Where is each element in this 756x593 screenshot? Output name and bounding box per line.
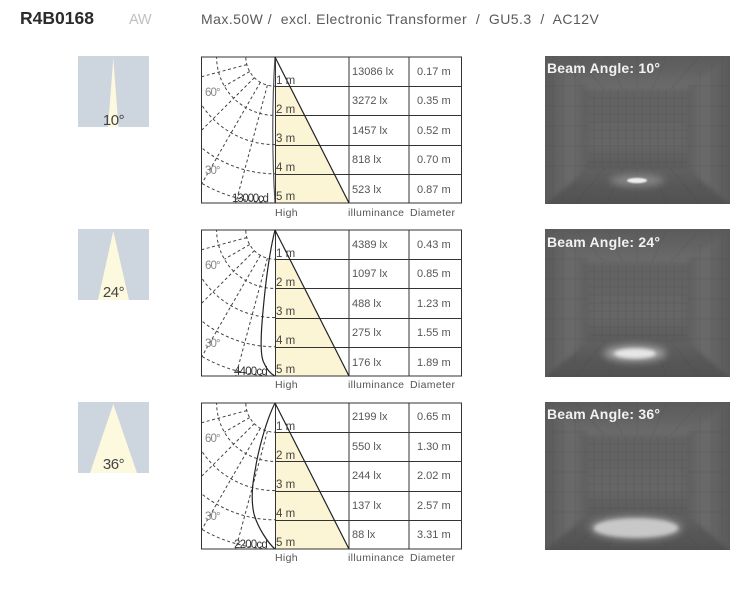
icon: 36 degree beam cone: [78, 402, 149, 473]
chart: polar distribution and illuminance table, 36 degrees: 244 lx: [352, 470, 382, 482]
chart: polar distribution and illuminance table, 24 degrees: 0.85 m: [417, 268, 451, 280]
chart: polar distribution and illuminance table, 36 degrees: 60°: [205, 433, 220, 445]
chart: polar distribution and illuminance table, 24 degrees: 60°: [205, 260, 220, 272]
panel: 24 degree beam row: [78, 229, 730, 390]
chart: polar distribution and illuminance table, 24 degrees: 2 m: [276, 277, 295, 289]
chart: polar distribution and illuminance table, 10 degrees: 0.52 m: [417, 125, 451, 137]
chart: polar distribution and illuminance table, 10 degrees: 2 m: [276, 104, 295, 116]
icon: 24 degree beam cone: [78, 229, 149, 301]
chart: polar distribution and illuminance table, 24 degrees: 176 lx: [352, 357, 382, 369]
chart: polar distribution and illuminance table, 24 degrees: 30°: [205, 338, 220, 350]
chart: polar distribution and illuminance table, 10 degrees: 0.70 m: [417, 154, 451, 166]
chart: polar distribution and illuminance table, 24 degrees: 1.89 m: [417, 357, 451, 369]
chart: polar distribution and illuminance table, 24 degrees: 1.23 m: [417, 298, 451, 310]
chart: polar distribution and illuminance table, 36 degrees: 30°: [205, 511, 220, 523]
chart: polar distribution and illuminance table, 10 degrees: 3272 lx: [352, 95, 388, 107]
panel: 10 degree beam row: [78, 56, 730, 218]
chart: polar distribution and illuminance table, 36 degrees: 88 lx: [352, 529, 376, 541]
image: room render, beam angle 24 degrees: Beam Angle: 24°: [547, 234, 660, 250]
chart: polar distribution and illuminance table, 10 degrees: 5 m: [276, 191, 295, 203]
chart: polar distribution and illuminance table, 10 degrees: High: [275, 207, 298, 219]
chart: polar distribution and illuminance table, 10 degrees: 0.87 m: [417, 184, 451, 196]
chart: polar distribution and illuminance table, 24 degrees: 4 m: [276, 335, 295, 347]
chart: polar distribution and illuminance table, 24 degrees: 1097 lx: [352, 268, 388, 280]
image: room render, beam angle 10 degrees: Beam Angle: 10°: [547, 60, 660, 76]
icon: 36 degree beam cone: 36°: [103, 456, 125, 473]
chart: polar distribution and illuminance table, 24 degrees: 3 m: [276, 306, 295, 318]
chart: polar distribution and illuminance table, 10 degrees: [129, 0, 462, 219]
chart: polar distribution and illuminance table, 36 degrees: 2.57 m: [417, 500, 451, 512]
chart: polar distribution and illuminance table, 36 degrees: 2 m: [276, 450, 295, 462]
chart: polar distribution and illuminance table, 24 degrees: Diameter: [410, 379, 456, 391]
chart: polar distribution and illuminance table, 36 degrees: 137 lx: [352, 500, 382, 512]
image: room render, beam angle 36 degrees: Beam Angle: 36°: [547, 406, 660, 422]
chart: polar distribution and illuminance table, 36 degrees: 3 m: [276, 479, 295, 491]
chart: polar distribution and illuminance table, 36 degrees: 550 lx: [352, 441, 382, 453]
image: room render, beam angle 10 degrees: [545, 56, 730, 204]
chart: polar distribution and illuminance table, 24 degrees: 4400cd: [234, 366, 267, 378]
specification line: Max.50W / excl. Electronic Transformer / GU5.3 / AC12V: [201, 11, 599, 27]
chart: polar distribution and illuminance table, 36 degrees: Diameter: [410, 552, 456, 564]
chart: polar distribution and illuminance table, 10 degrees: 60°: [205, 87, 220, 99]
chart: polar distribution and illuminance table, 10 degrees: 523 lx: [352, 184, 382, 196]
chart: polar distribution and illuminance table, 36 degrees: 2.02 m: [417, 470, 451, 482]
chart: polar distribution and illuminance table, 24 degrees: 4389 lx: [352, 239, 388, 251]
title: product code: R4B0168: [20, 8, 94, 28]
chart: polar distribution and illuminance table, 36 degrees: 5 m: [276, 537, 295, 549]
chart: polar distribution and illuminance table, 36 degrees: 2200cd: [234, 539, 267, 551]
chart: polar distribution and illuminance table, 36 degrees: 3.31 m: [417, 529, 451, 541]
chart: polar distribution and illuminance table, 10 degrees: 4 m: [276, 162, 295, 174]
image: room render, beam angle 24 degrees: [545, 229, 730, 377]
chart: polar distribution and illuminance table, 36 degrees: illuminance: [348, 552, 404, 564]
chart: polar distribution and illuminance table, 10 degrees: 0.17 m: [417, 66, 451, 78]
chart: polar distribution and illuminance table, 24 degrees: 0.43 m: [417, 239, 451, 251]
chart: polar distribution and illuminance table, 24 degrees: 488 lx: [352, 298, 382, 310]
chart: polar distribution and illuminance table, 36 degrees: [129, 257, 462, 564]
chart: polar distribution and illuminance table, 10 degrees: 1457 lx: [352, 125, 388, 137]
chart: polar distribution and illuminance table, 24 degrees: 1.55 m: [417, 327, 451, 339]
chart: polar distribution and illuminance table, 10 degrees: 0.35 m: [417, 95, 451, 107]
chart: polar distribution and illuminance table, 10 degrees: 1 m: [276, 75, 295, 87]
panel: 36 degree beam row: [78, 402, 730, 563]
chart: polar distribution and illuminance table, 10 degrees: 13000cd: [232, 193, 269, 205]
chart: polar distribution and illuminance table, 24 degrees: 1 m: [276, 248, 295, 260]
label: AW: AW: [129, 12, 152, 28]
chart: polar distribution and illuminance table, 36 degrees: 1.30 m: [417, 441, 451, 453]
chart: polar distribution and illuminance table, 36 degrees: 0.65 m: [417, 411, 451, 423]
icon: 10 degree beam cone: 10°: [103, 112, 125, 129]
chart: polar distribution and illuminance table, 10 degrees: 3 m: [276, 133, 295, 145]
chart: polar distribution and illuminance table, 10 degrees: 30°: [205, 165, 220, 177]
chart: polar distribution and illuminance table, 10 degrees: illuminance: [348, 207, 404, 219]
image: room render, beam angle 36 degrees: [545, 402, 730, 550]
chart: polar distribution and illuminance table, 36 degrees: 2199 lx: [352, 411, 388, 423]
chart: polar distribution and illuminance table, 10 degrees: 13086 lx: [352, 66, 394, 78]
chart: polar distribution and illuminance table, 36 degrees: 4 m: [276, 508, 295, 520]
icon: 24 degree beam cone: 24°: [103, 284, 125, 301]
chart: polar distribution and illuminance table, 24 degrees: 5 m: [276, 364, 295, 376]
chart: polar distribution and illuminance table, 36 degrees: 1 m: [276, 421, 295, 433]
icon: 10 degree beam cone: [78, 56, 149, 129]
chart: polar distribution and illuminance table, 24 degrees: 275 lx: [352, 327, 382, 339]
chart: polar distribution and illuminance table, 36 degrees: High: [275, 552, 298, 564]
chart: polar distribution and illuminance table, 10 degrees: 818 lx: [352, 154, 382, 166]
chart: polar distribution and illuminance table, 24 degrees: High: [275, 379, 298, 391]
chart: polar distribution and illuminance table, 24 degrees: [129, 84, 462, 391]
chart: polar distribution and illuminance table, 10 degrees: Diameter: [410, 207, 456, 219]
chart: polar distribution and illuminance table, 24 degrees: illuminance: [348, 379, 404, 391]
